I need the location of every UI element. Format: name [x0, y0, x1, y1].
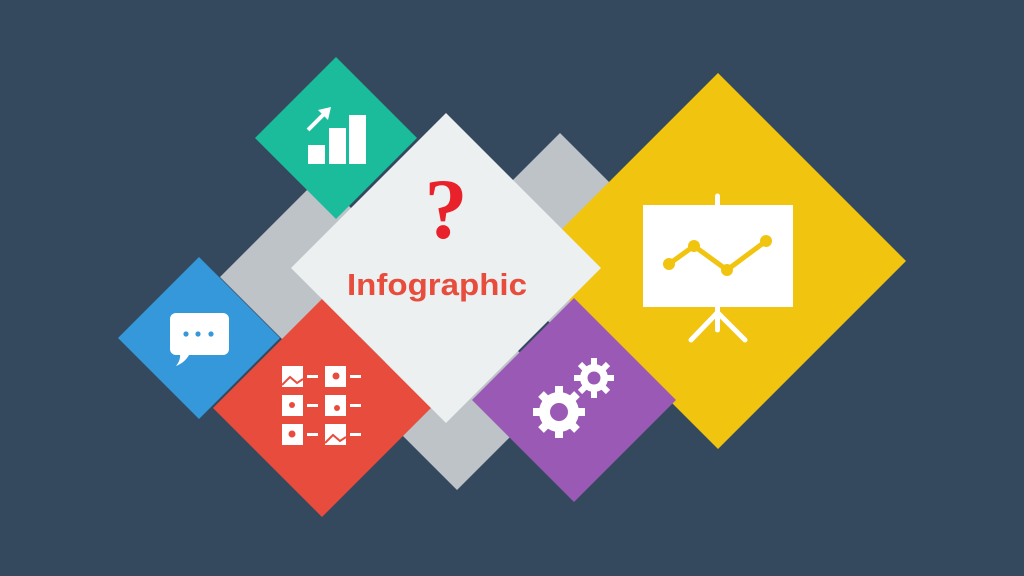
icon: question mark: ?: [424, 161, 468, 257]
panel: purple gears: [472, 298, 676, 502]
icon: bar chart: [308, 107, 366, 164]
icon: gears: [533, 358, 614, 438]
panel: red gallery: [213, 299, 431, 517]
icon: image list: [282, 366, 361, 445]
icon: presentation board: [643, 196, 793, 340]
gray diamond right: [460, 133, 660, 333]
gray diamond left: [220, 177, 420, 377]
panel: blue chat: [118, 257, 280, 419]
panel: center: [291, 113, 601, 423]
panel: green chart: [255, 57, 417, 219]
icon: speech bubble: [170, 313, 229, 366]
gray diamond bottom: [357, 290, 557, 490]
panel: yellow presentation: [530, 73, 906, 449]
title: Infographic: [347, 267, 527, 302]
